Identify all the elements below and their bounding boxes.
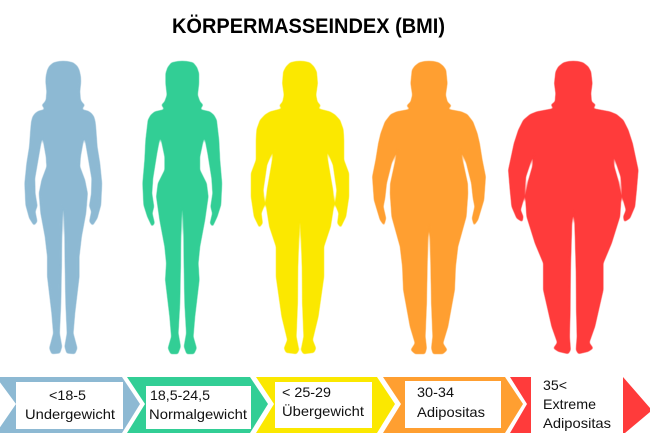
chevron: extreme obesity: Extreme (543, 396, 596, 412)
figure: underweight silhouette (25, 61, 102, 354)
chevron: overweight: < 25-29 (282, 384, 331, 400)
figure: obese silhouette (372, 61, 486, 354)
chevron: normal weight: Normalgewicht (149, 406, 247, 422)
title: KÖRPERMASSEINDEX (BMI) (172, 15, 445, 38)
chevron: extreme obesity: Adipositas (543, 415, 611, 431)
chevron: normal weight: 18,5-24,5 (150, 387, 210, 403)
chevron: obese (383, 377, 523, 433)
chevron: overweight: Übergewicht (282, 402, 364, 419)
figure: extreme obesity silhouette (508, 61, 638, 354)
figure: overweight silhouette (251, 61, 349, 354)
chevron: normal weight (127, 377, 268, 433)
chevron: obese: Adipositas (417, 404, 485, 420)
chevron: underweight (0, 377, 140, 433)
figure: normal weight silhouette (143, 61, 222, 354)
chevron: extreme obesity (510, 370, 650, 433)
chevron: underweight: Undergewicht (25, 406, 115, 422)
chevron: underweight: <18-5 (49, 387, 86, 403)
chevron: obese: 30-34 (417, 384, 454, 400)
chevron: extreme obesity: 35< (543, 377, 567, 393)
chevron: overweight (256, 377, 395, 433)
